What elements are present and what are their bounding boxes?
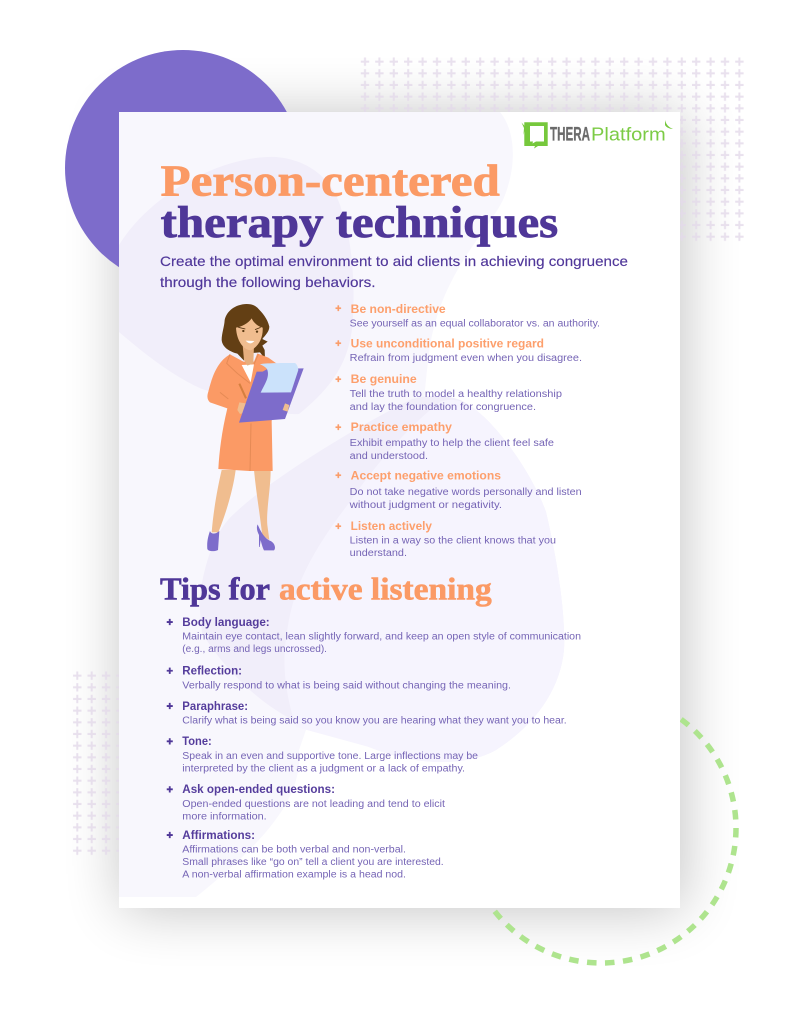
tip: ask open-ended questions: more information. <box>182 812 267 822</box>
title: therapy techniques <box>161 198 558 247</box>
tip: affirmations: A non-verbal affirmation example is a head nod. <box>182 870 406 880</box>
card drop shadow <box>122 114 683 910</box>
item: accept negative emotions: Accept negative emotions <box>351 470 501 482</box>
tip: ask open-ended questions: Open-ended questions are not leading and tend to elicit <box>182 799 445 810</box>
logo: TheraPlatform <box>522 120 673 148</box>
heading: tips for active listening: Tips for <box>160 570 270 606</box>
tip: affirmations: Affirmations: <box>182 830 255 842</box>
item: accept negative emotions <box>336 470 582 511</box>
pencil <box>239 384 246 398</box>
holding hand <box>283 403 289 412</box>
purple background circle <box>65 50 301 286</box>
intro text: through the following behaviors. <box>160 274 376 290</box>
paper <box>260 363 298 393</box>
tip: paraphrase: Paraphrase: <box>182 701 248 713</box>
tip: body language: (e.g., arms and legs uncrossed). <box>182 644 327 655</box>
item: listen actively: Listen in a way so the client knows that you <box>350 536 556 546</box>
legs <box>212 470 271 540</box>
writing hand <box>237 402 246 414</box>
tip: affirmations: Small phrases like “go on” tell a client you are interested. <box>182 857 444 868</box>
shoes <box>207 524 275 551</box>
title: Person-centered <box>161 156 500 205</box>
smile <box>246 341 254 343</box>
item: unconditional positive regard: Refrain from judgment even when you disagree. <box>350 353 582 364</box>
neck <box>243 345 254 366</box>
item: practice empathy: Practice empathy <box>351 422 453 434</box>
item: listen actively <box>336 521 556 559</box>
item: practice empathy <box>336 422 554 462</box>
item: practice empathy: and understood. <box>350 451 428 462</box>
tip: tone: Tone: <box>182 736 212 748</box>
tip: paraphrase: Clarify what is being said so you know you are hearing what they want you to hear. <box>182 716 567 726</box>
hair <box>222 304 269 361</box>
item: be genuine: Be genuine <box>351 374 417 386</box>
plus pattern: top right <box>358 56 747 243</box>
item: be genuine <box>336 374 562 413</box>
item: practice empathy: Exhibit empathy to help the client feel safe <box>350 438 554 449</box>
item: unconditional positive regard: Use unconditional positive regard <box>351 338 544 350</box>
tip: body language: Maintain eye contact, lean slightly forward, and keep an open style of communication <box>182 632 581 642</box>
intro text <box>160 253 628 290</box>
tip: reflection: Reflection: <box>182 666 242 678</box>
tip: tone: Speak in an even and supportive tone. Large inflections may be <box>182 751 478 762</box>
clipboard <box>239 368 304 423</box>
item: accept negative emotions: without judgment or negativity. <box>349 500 502 511</box>
panel: white card <box>119 112 680 908</box>
item: unconditional positive regard <box>336 338 582 364</box>
item: be non-directive: See yourself as an equal collaborator vs. an authority. <box>350 318 600 330</box>
logo: TheraPlatform: Platform <box>591 125 666 145</box>
tip: ask open-ended questions <box>167 784 445 822</box>
list: active listening tips <box>167 617 581 880</box>
tip: reflection <box>167 666 511 692</box>
heading: tips for active listening: active listening <box>279 570 492 606</box>
tip: affirmations <box>167 830 444 880</box>
title <box>161 156 558 247</box>
tip: tone: interpreted by the client as a judgment or a lack of empathy. <box>182 764 465 774</box>
heading: tips for active listening <box>160 570 492 606</box>
logo leaf accent <box>665 120 673 129</box>
tip: paraphrase <box>167 701 567 726</box>
coat lapels and seam <box>220 354 258 471</box>
tip: body language <box>167 617 581 655</box>
item: listen actively: understand. <box>350 548 407 559</box>
tip: tone <box>167 736 478 774</box>
facial features <box>238 327 261 330</box>
logo wordmark: THERA <box>550 125 590 146</box>
list: person-centered behaviors <box>336 304 600 559</box>
item: be genuine: and lay the foundation for congruence. <box>350 402 536 413</box>
item: be non-directive <box>336 304 600 330</box>
green dashed circle <box>466 693 736 963</box>
tip: reflection: Verbally respond to what is being said without changing the meaning. <box>182 680 511 692</box>
item: be genuine: Tell the truth to model a healthy relationship <box>350 389 562 400</box>
tip: body language: Body language: <box>182 617 270 629</box>
item: accept negative emotions: Do not take negative words personally and listen <box>350 487 582 498</box>
tip: ask open-ended questions: Ask open-ended questions: <box>182 784 335 796</box>
face <box>236 318 263 350</box>
card background blobs <box>119 156 564 762</box>
tip: affirmations: Affirmations can be both verbal and non-verbal. <box>182 844 406 856</box>
logo icon: speech square <box>522 122 548 148</box>
illustration: therapist with clipboard <box>207 304 304 551</box>
item: listen actively: Listen actively <box>351 521 433 533</box>
plus pattern: bottom left <box>70 670 128 857</box>
intro text: Create the optimal environment to aid clients in achieving congruence <box>160 253 628 269</box>
shirt <box>242 364 254 382</box>
item: be non-directive: Be non-directive <box>351 304 446 316</box>
coat <box>207 353 279 471</box>
